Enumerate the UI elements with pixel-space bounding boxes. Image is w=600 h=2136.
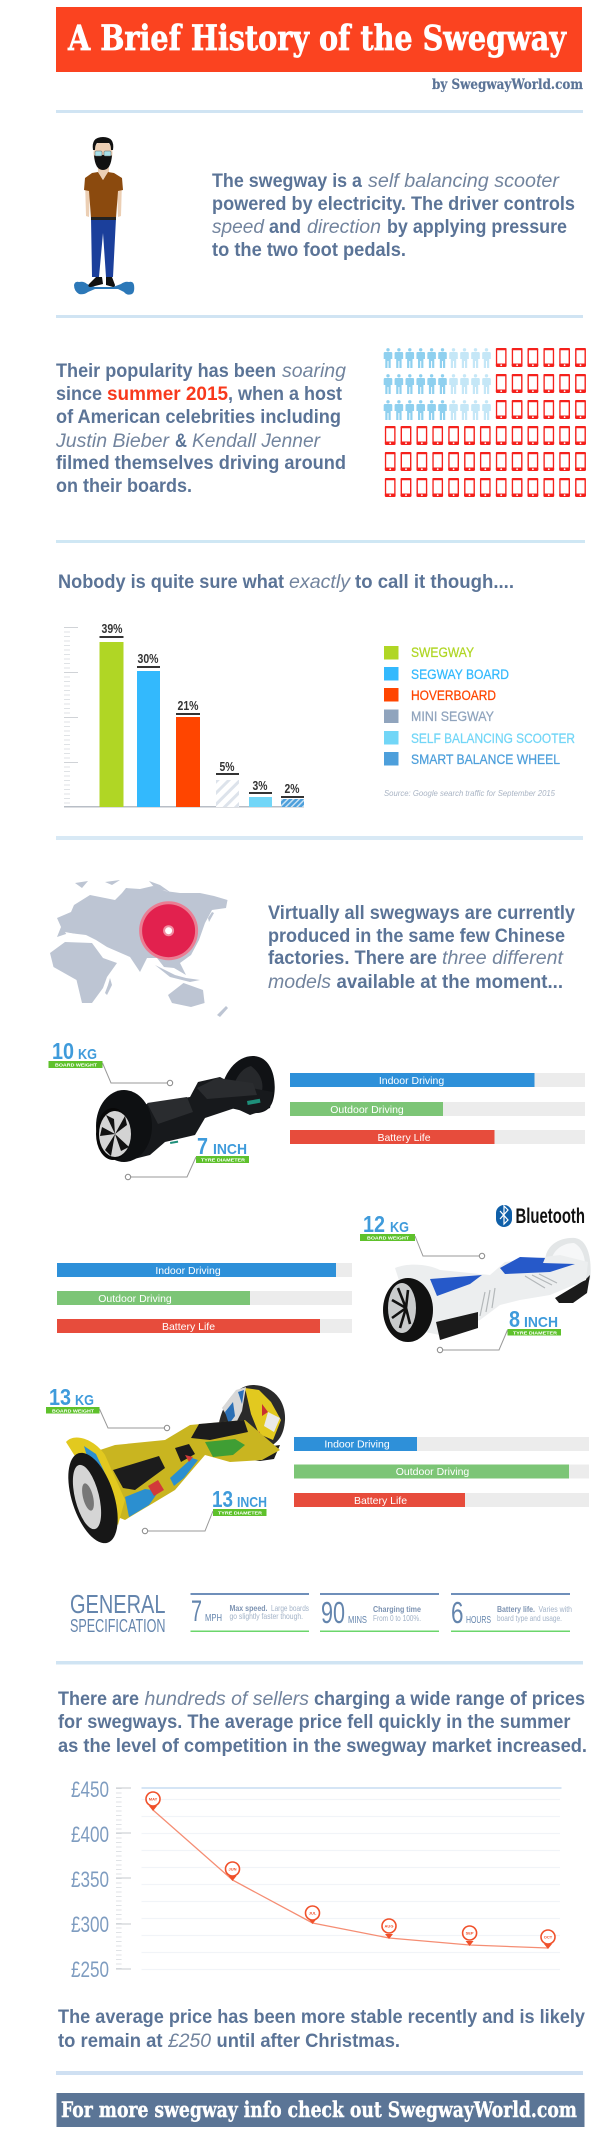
factories text: available at the moment... — [336, 971, 563, 993]
sellers text — [58, 1688, 587, 1757]
callout: 13 KG: KG — [75, 1392, 94, 1409]
bar chart: names: 2% — [284, 782, 300, 796]
callout: 8 INCH: INCH — [524, 1314, 558, 1331]
bar chart: names: 21% — [178, 699, 198, 713]
chart legend: SMART BALANCE WHEEL — [411, 752, 560, 767]
factories text: models — [268, 971, 331, 993]
price outlook text: until after Christmas. — [216, 2030, 400, 2052]
bars: white swegway: Indoor Driving — [155, 1265, 221, 1277]
spec card: max speed: MPH — [205, 1613, 222, 1624]
product: black swegway — [96, 1056, 275, 1162]
factories text: factories. There are — [268, 947, 437, 969]
factories text: Virtually all swegways are currently — [268, 902, 575, 924]
spec card: charging time: 90 — [321, 1595, 345, 1630]
price outlook text: to remain at — [58, 2030, 163, 2052]
chart source note: Source: Google search traffic for September 2015 — [384, 788, 555, 798]
bars: black swegway: Battery Life — [377, 1132, 431, 1144]
callout: 8 INCH: 8 — [509, 1306, 520, 1332]
callout: 12 KG: KG — [390, 1219, 409, 1236]
line chart: average price: MAY — [149, 1796, 158, 1802]
intro text: to the two foot pedals. — [212, 239, 406, 261]
general specification heading: GENERAL — [70, 1589, 166, 1619]
intro text — [212, 170, 575, 261]
bars: graffiti swegway: Indoor Driving — [324, 1438, 390, 1450]
heading: naming: to call it though.... — [355, 571, 514, 593]
title banner — [56, 7, 582, 72]
bars: black swegway — [290, 1073, 585, 1144]
heading: naming — [58, 571, 514, 593]
factories text — [268, 902, 575, 993]
intro text: and — [269, 216, 301, 238]
popularity text: , when a host — [228, 383, 342, 405]
product: white swegway — [383, 1238, 591, 1342]
callout: 8 INCH — [437, 1306, 561, 1353]
price outlook text — [58, 2006, 585, 2052]
intro text: by applying pressure — [387, 216, 567, 238]
sellers text: for swegways. The average price fell quickly in the summer — [58, 1711, 571, 1733]
byline: by SwegwayWorld.com — [432, 77, 583, 93]
spec card: battery life: Varies with — [538, 1604, 572, 1614]
popularity text: Kendall Jenner — [192, 430, 321, 452]
line chart: average price: JUL — [309, 1910, 317, 1916]
line chart: average price: JUN — [228, 1866, 237, 1872]
spec card: battery life — [451, 1593, 572, 1632]
spec card: max speed: 7 — [191, 1595, 202, 1628]
line chart: average price: £350 — [71, 1867, 109, 1892]
callout: 10 KG: BOARD WEIGHT — [55, 1062, 97, 1068]
sellers text: hundreds of sellers — [144, 1688, 309, 1710]
callout: 12 KG — [360, 1211, 485, 1259]
spec card: charging time: MINS — [348, 1615, 367, 1626]
popularity text: summer 2015 — [107, 383, 228, 405]
spec card: charging time — [320, 1593, 439, 1632]
chart legend: SELF BALANCING SCOOTER — [411, 731, 575, 746]
callout: 13 KG: 13 — [49, 1384, 71, 1410]
general specification heading: SPECIFICATION — [70, 1616, 166, 1636]
callout: 13 INCH: INCH — [237, 1494, 267, 1511]
chart legend: SEGWAY BOARD — [411, 667, 509, 682]
callout: 7 INCH: INCH — [213, 1141, 247, 1158]
line chart: average price: OCT — [544, 1934, 553, 1940]
callout: 13 KG — [46, 1384, 170, 1431]
product: graffiti swegway — [59, 1385, 285, 1549]
line chart: average price: £400 — [71, 1822, 109, 1847]
line chart: average price: £300 — [71, 1912, 109, 1937]
popularity text: Their popularity has been — [56, 360, 276, 382]
general specification heading — [70, 1589, 166, 1636]
sellers text: charging a wide range of prices — [314, 1688, 585, 1710]
bar chart: names: 3% — [252, 779, 268, 793]
spec card: battery life: board type and usage. — [497, 1613, 562, 1623]
popularity text: filmed themselves driving around — [56, 452, 346, 474]
spec card: charging time: Charging time — [373, 1604, 421, 1614]
callout: 7 INCH: 7 — [197, 1133, 208, 1159]
popularity text — [55, 360, 346, 497]
spec card: battery life: Battery life. — [497, 1604, 535, 1614]
popularity text: since — [56, 383, 102, 405]
line chart: average price: SEP — [466, 1930, 474, 1936]
spec card: battery life: 6 — [451, 1595, 464, 1630]
illustration: man on swegway — [74, 137, 134, 295]
bars: graffiti swegway: Outdoor Driving — [396, 1466, 469, 1478]
heading: naming: Nobody is quite sure what — [58, 571, 284, 593]
popularity text: on their boards. — [56, 475, 192, 497]
popularity text: soaring — [282, 360, 346, 382]
callout: 13 INCH — [142, 1486, 267, 1534]
sellers text: There are — [58, 1688, 139, 1710]
bars: white swegway: Outdoor Driving — [98, 1293, 172, 1305]
callout: 12 KG: 12 — [363, 1211, 385, 1237]
popularity text: Justin Bieber — [55, 430, 171, 452]
callout: 10 KG: 10 — [52, 1038, 74, 1064]
bars: black swegway: Indoor Driving — [379, 1075, 444, 1087]
callout: 7 INCH: TYRE DIAMETER — [201, 1158, 246, 1162]
callout: 10 KG — [48, 1038, 173, 1086]
bar chart: names: 39% — [102, 622, 122, 636]
factories text: produced in the same few Chinese — [268, 925, 565, 947]
line chart: average price: £450 — [71, 1777, 109, 1802]
chart legend: SWEGWAY — [411, 645, 474, 660]
spec card: charging time: From 0 to 100%. — [373, 1613, 421, 1623]
spec card: max speed: Large boards — [271, 1603, 309, 1613]
callout: 7 INCH — [125, 1133, 249, 1180]
heading: naming: exactly — [289, 571, 351, 593]
callout: 13 INCH: 13 — [212, 1486, 233, 1512]
spec card: max speed — [190, 1593, 309, 1632]
bar chart: names — [64, 622, 304, 808]
callout: 12 KG: BOARD WEIGHT — [367, 1236, 409, 1240]
intro text: speed — [212, 216, 265, 238]
popularity text: & — [175, 430, 187, 452]
factories text: three different — [442, 947, 565, 969]
intro text: self balancing scooter — [368, 170, 561, 192]
callout: 10 KG: KG — [78, 1046, 97, 1063]
popularity text: of American celebrities including — [56, 406, 341, 428]
chart legend: MINI SEGWAY — [411, 709, 494, 724]
bars: white swegway — [57, 1263, 352, 1333]
callout: 13 INCH: TYRE DIAMETER — [218, 1510, 263, 1516]
chart legend — [384, 645, 575, 767]
price outlook text: £250 — [167, 2030, 211, 2052]
intro text: direction — [307, 216, 381, 238]
bars: black swegway: Outdoor Driving — [330, 1104, 404, 1116]
bars: white swegway: Battery Life — [162, 1321, 215, 1333]
line chart: average price: £250 — [71, 1957, 109, 1982]
spec card: battery life: HOURS — [466, 1615, 491, 1626]
line chart: average price — [71, 1777, 562, 1982]
intro text: powered by electricity. The driver controls — [212, 193, 575, 215]
callout: 13 KG: BOARD WEIGHT — [52, 1408, 94, 1414]
bars: graffiti swegway: Battery Life — [354, 1495, 407, 1507]
bluetooth badge — [496, 1205, 585, 1228]
bar chart: names: 5% — [220, 760, 234, 774]
line chart: average price: AUG — [385, 1924, 393, 1928]
spec card: max speed: Max speed. — [230, 1603, 268, 1613]
chart legend: HOVERBOARD — [411, 688, 496, 703]
bars: graffiti swegway — [294, 1437, 589, 1507]
pictogram: people and phones — [384, 348, 586, 497]
world map with China marker — [50, 880, 228, 1017]
bar chart: names: 30% — [138, 652, 158, 666]
spec card: max speed: go slightly faster though. — [230, 1611, 303, 1621]
callout: 8 INCH: TYRE DIAMETER — [513, 1330, 558, 1336]
intro text: The swegway is a — [212, 170, 362, 192]
